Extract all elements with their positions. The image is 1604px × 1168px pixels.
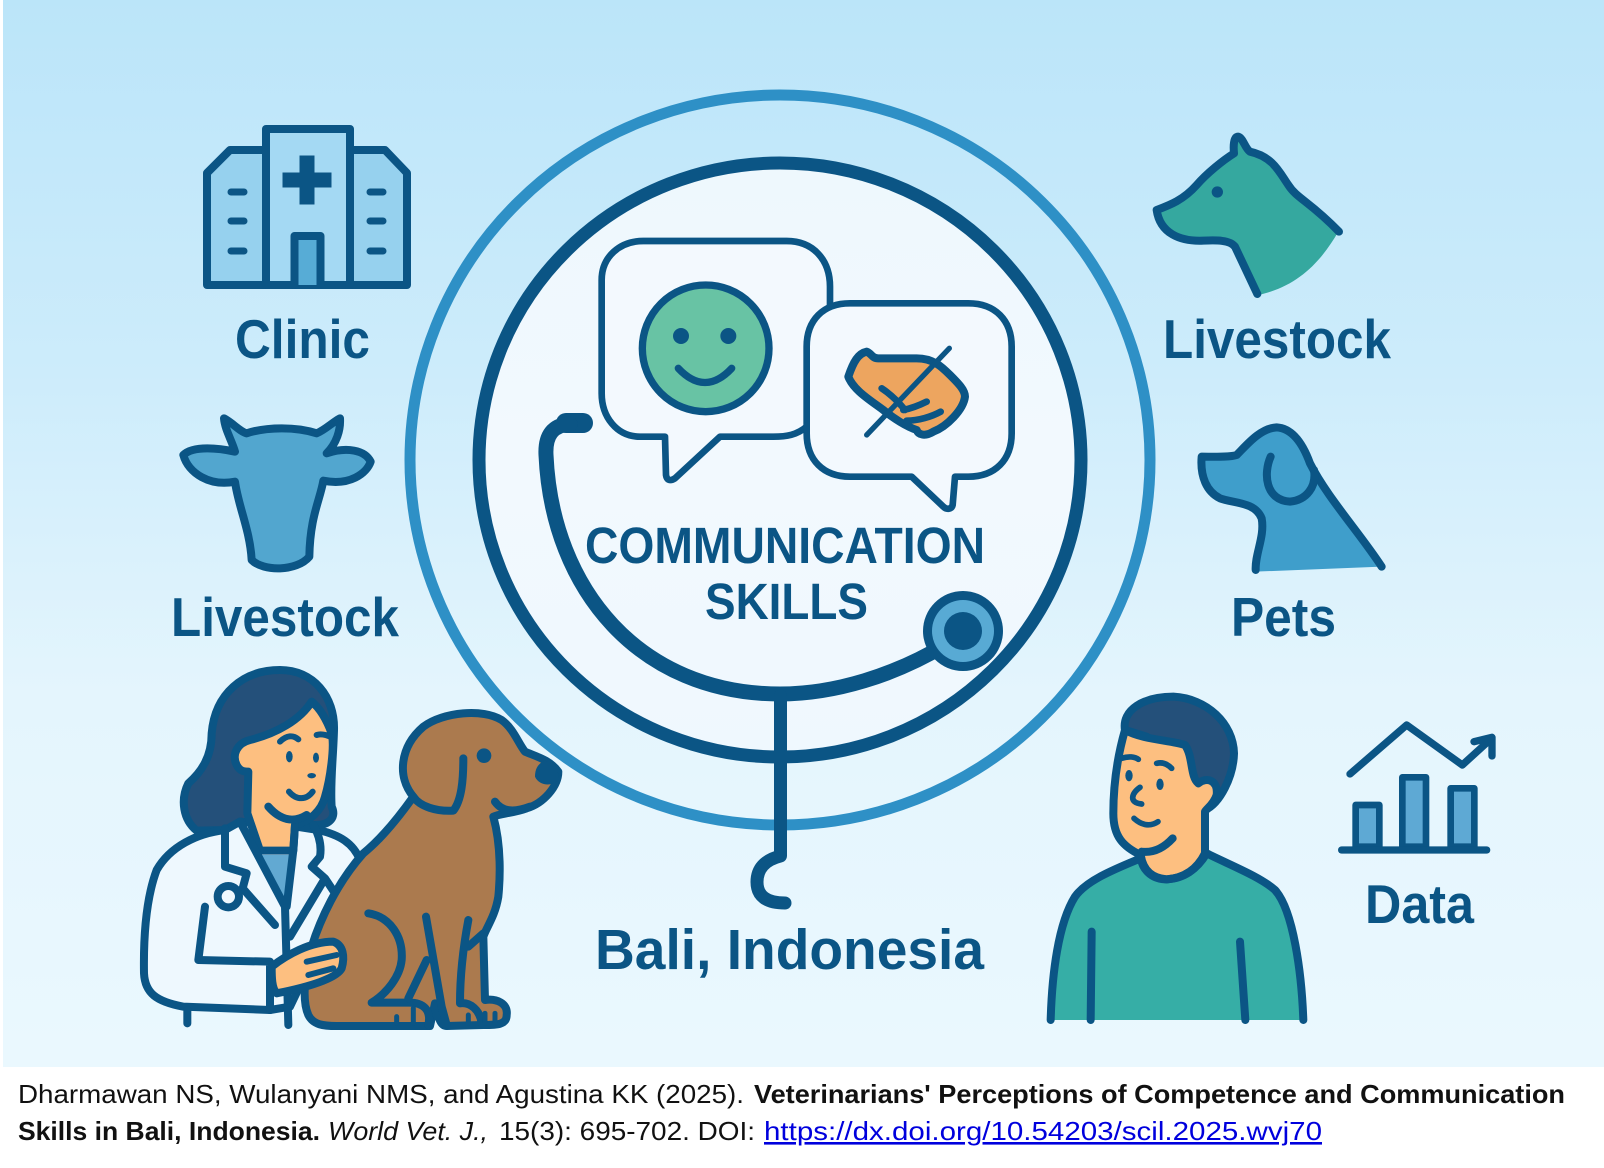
citation footer: [18, 1079, 1565, 1146]
citation footer: https://dx.doi.org/10.54203/scil.2025.wvj70: [764, 1116, 1322, 1146]
illustration: veterinarian with dog: [144, 670, 558, 1026]
citation footer: Dharmawan NS, Wulanyani NMS, and Agustina KK (2025).: [18, 1079, 744, 1109]
veterinarian hand: [272, 942, 343, 993]
label: Pets: Pets: [1231, 586, 1336, 648]
heading: communication skills: COMMUNICATION: [585, 517, 985, 574]
label: Livestock right: Livestock: [1163, 308, 1391, 370]
speech bubble: smiley: [602, 241, 830, 480]
hair: [1125, 697, 1234, 810]
smiley face: [642, 285, 769, 412]
speech bubble: crossed-out hand: [807, 303, 1012, 509]
label: Livestock left: Livestock: [171, 586, 399, 648]
icon: teal livestock head: [1157, 137, 1339, 295]
heading: communication skills: SKILLS: [705, 573, 868, 630]
heading: communication skills: [585, 517, 985, 630]
green shirt: [1051, 853, 1303, 1020]
stethoscope chest piece: [923, 591, 1003, 671]
hand icon: [848, 348, 965, 435]
icon: cow head: [183, 418, 371, 568]
icon: data chart: [1342, 725, 1492, 850]
citation footer: Veterinarians' Perceptions of Competence and Communication: [754, 1079, 1565, 1109]
illustration: man: [1051, 697, 1303, 1020]
label: Clinic: Clinic: [235, 308, 370, 370]
citation footer: World Vet. J.,: [328, 1116, 488, 1146]
veterinarian: [144, 670, 360, 1025]
outer ring: [410, 95, 1150, 825]
inner ring and disc: [479, 163, 1081, 757]
label: Bali, Indonesia: Bali, Indonesia: [595, 918, 985, 982]
face and neck: [1113, 730, 1217, 879]
icon: clinic building: [207, 129, 407, 285]
stethoscope: [546, 423, 1003, 903]
label: Data: Data: [1365, 873, 1474, 935]
citation footer: Skills in Bali, Indonesia.: [18, 1116, 320, 1146]
citation footer: 15(3): 695-702. DOI:: [499, 1116, 755, 1146]
icon: pet dog: [1201, 427, 1382, 572]
brown dog: [305, 713, 558, 1026]
